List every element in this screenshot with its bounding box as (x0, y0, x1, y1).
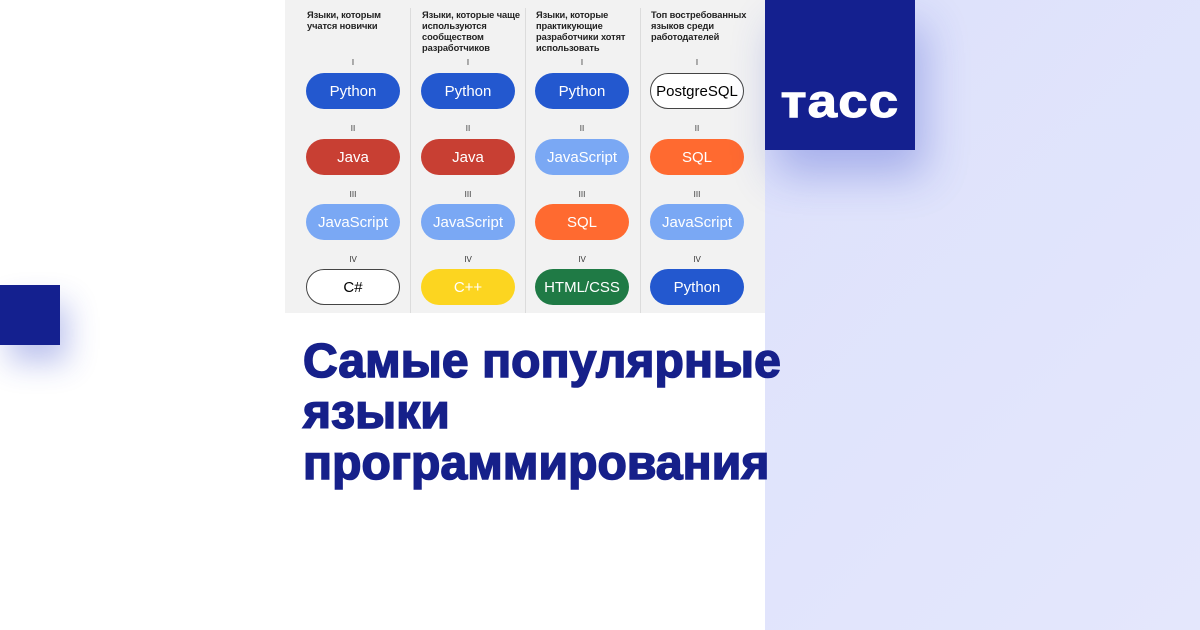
column: beginners (306, 10, 400, 305)
column: beginners: JavaScript (318, 214, 388, 231)
column: beginners: C# (343, 279, 363, 296)
column: beginners: II (351, 124, 355, 133)
column: employers: SQL (682, 149, 712, 166)
column: want to use: SQL (567, 214, 597, 231)
column: employers: IV (693, 255, 701, 264)
column: community: JavaScript (433, 214, 503, 231)
title: Самые популярные (303, 335, 781, 388)
column: employers: II (695, 124, 699, 133)
title (302, 335, 781, 490)
column: community: III (465, 190, 471, 199)
column: want to use: Языки, которые практикующие разработчики хотят использовать (536, 10, 625, 53)
column: beginners: Языки, которым учатся новички (307, 10, 381, 31)
panel: rankings (285, 0, 765, 313)
logo: TASS (765, 0, 915, 150)
column: employers: Python (674, 279, 720, 296)
column: want to use: IV (578, 255, 586, 264)
title: языки (303, 386, 450, 439)
column: community: Java (452, 149, 484, 166)
column: beginners: III (350, 190, 356, 199)
title: программирования (303, 437, 769, 490)
column: want to use: Python (559, 83, 605, 100)
decorative square (0, 285, 60, 345)
column: employers: Топ востребованных языков среди работодателей (651, 10, 746, 42)
column: community: IV (464, 255, 472, 264)
column: community: Языки, которые чаще используются сообществом разработчиков (422, 10, 520, 53)
column: employers (650, 10, 746, 305)
column: community: C++ (454, 279, 482, 296)
column: employers: III (694, 190, 700, 199)
column: want to use: I (581, 58, 583, 67)
column: community: II (466, 124, 470, 133)
logo: TASS: тасс (781, 75, 899, 127)
column: want to use: HTML/CSS (544, 279, 620, 296)
column: community: I (467, 58, 469, 67)
column: beginners: IV (349, 255, 357, 264)
column: employers: PostgreSQL (656, 83, 738, 100)
column: beginners: Python (330, 83, 376, 100)
column: beginners: Java (337, 149, 369, 166)
column: employers: I (696, 58, 698, 67)
column: want to use: III (579, 190, 585, 199)
column: want to use: JavaScript (547, 149, 617, 166)
column: want to use: II (580, 124, 584, 133)
column: community: Python (445, 83, 491, 100)
column: community (421, 10, 520, 305)
column: beginners: I (352, 58, 354, 67)
column: want to use (535, 10, 629, 305)
column: employers: JavaScript (662, 214, 732, 231)
